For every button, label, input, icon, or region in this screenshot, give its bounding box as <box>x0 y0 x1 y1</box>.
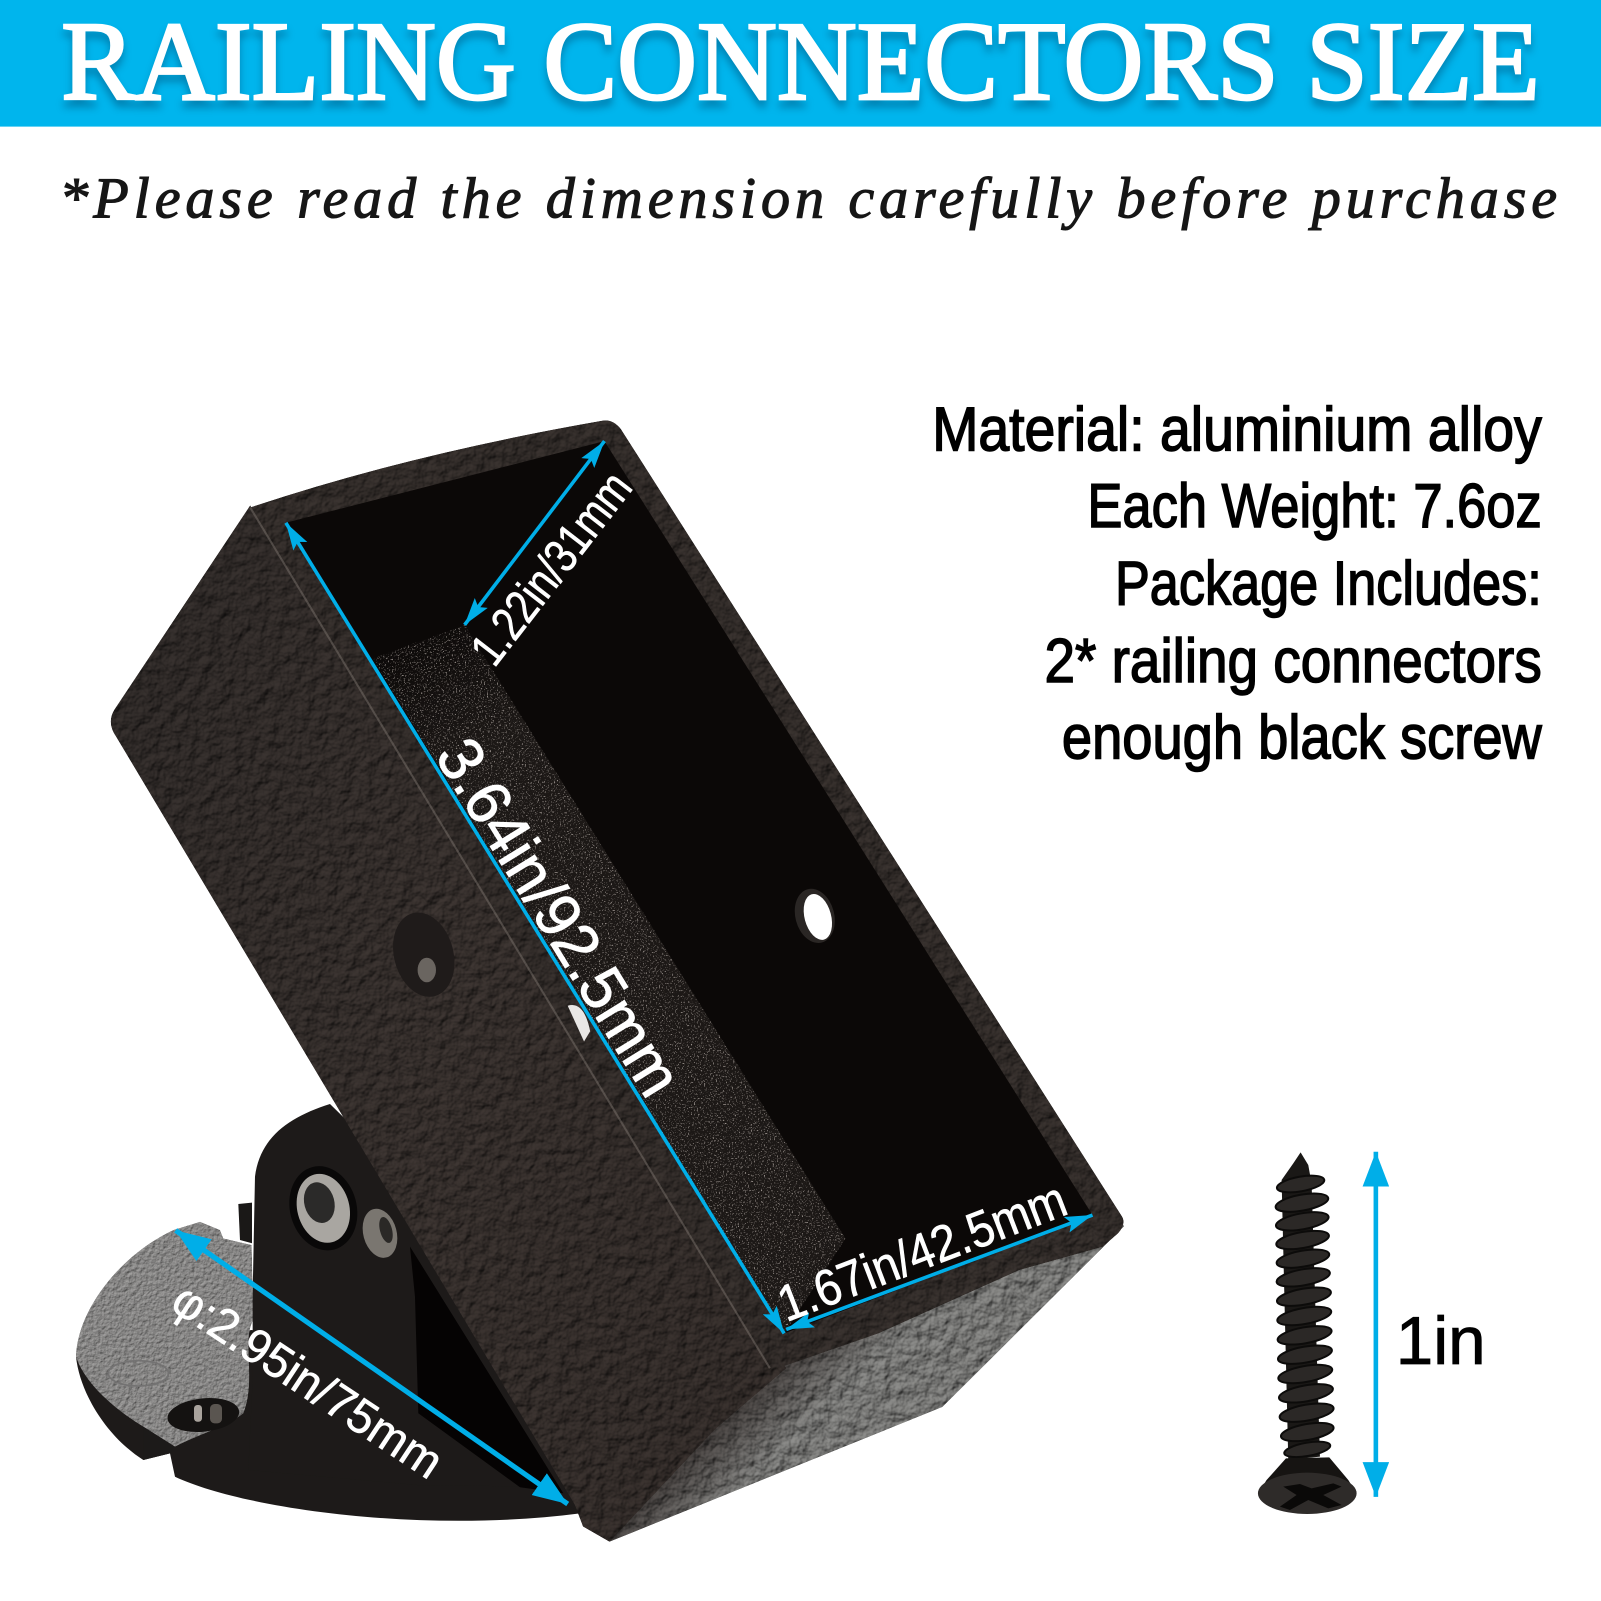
inner floor <box>373 625 845 1333</box>
hex bolt <box>280 1158 367 1258</box>
round base plate <box>76 1222 580 1521</box>
subtitle note: *Please read the dimension carefully before purchase <box>59 165 1557 230</box>
seam highlight <box>250 507 770 1368</box>
bright glint <box>568 1005 590 1041</box>
screw illustration <box>1258 1152 1357 1514</box>
connector bottom face <box>575 1210 1124 1542</box>
railing connector photo illustration <box>76 420 1124 1542</box>
specification text block: Material: aluminium alloy <box>932 395 1543 464</box>
specification text block: 2* railing connectors <box>1045 627 1542 696</box>
set screw <box>357 1205 403 1262</box>
title: RAILING CONNECTORS SIZE <box>61 0 1540 124</box>
screw head <box>1258 1457 1357 1514</box>
specification text block <box>932 395 1543 773</box>
label: screw length: 1in <box>1396 1304 1486 1379</box>
black wedge behind connector <box>410 1247 563 1493</box>
connector opening <box>286 441 1093 1333</box>
dimension: screw length <box>1374 1152 1378 1497</box>
specification text block: enough black screw <box>1062 704 1543 773</box>
connector rim <box>250 420 1124 1370</box>
screw threads <box>1274 1173 1335 1460</box>
inner wall hole <box>789 884 841 948</box>
connector side face <box>111 505 786 1542</box>
title banner <box>0 0 1601 127</box>
dimension: base diameter <box>162 1230 568 1504</box>
dimension: length <box>286 523 784 1333</box>
side face dimple <box>384 906 463 1004</box>
dimension: outer width: 1.67in/42.5mm <box>770 1170 1074 1333</box>
dimension: inner width: 1.22in/31mm <box>461 462 643 676</box>
mounting bracket block <box>238 1104 577 1510</box>
dimension: length: 3.64in/92.5mm <box>422 726 695 1109</box>
mounting slot <box>166 1395 241 1435</box>
dimension: base diameter: φ:2.95in/75mm <box>162 1273 452 1490</box>
dimple <box>108 1361 168 1386</box>
screw tip and shaft <box>1282 1152 1320 1460</box>
